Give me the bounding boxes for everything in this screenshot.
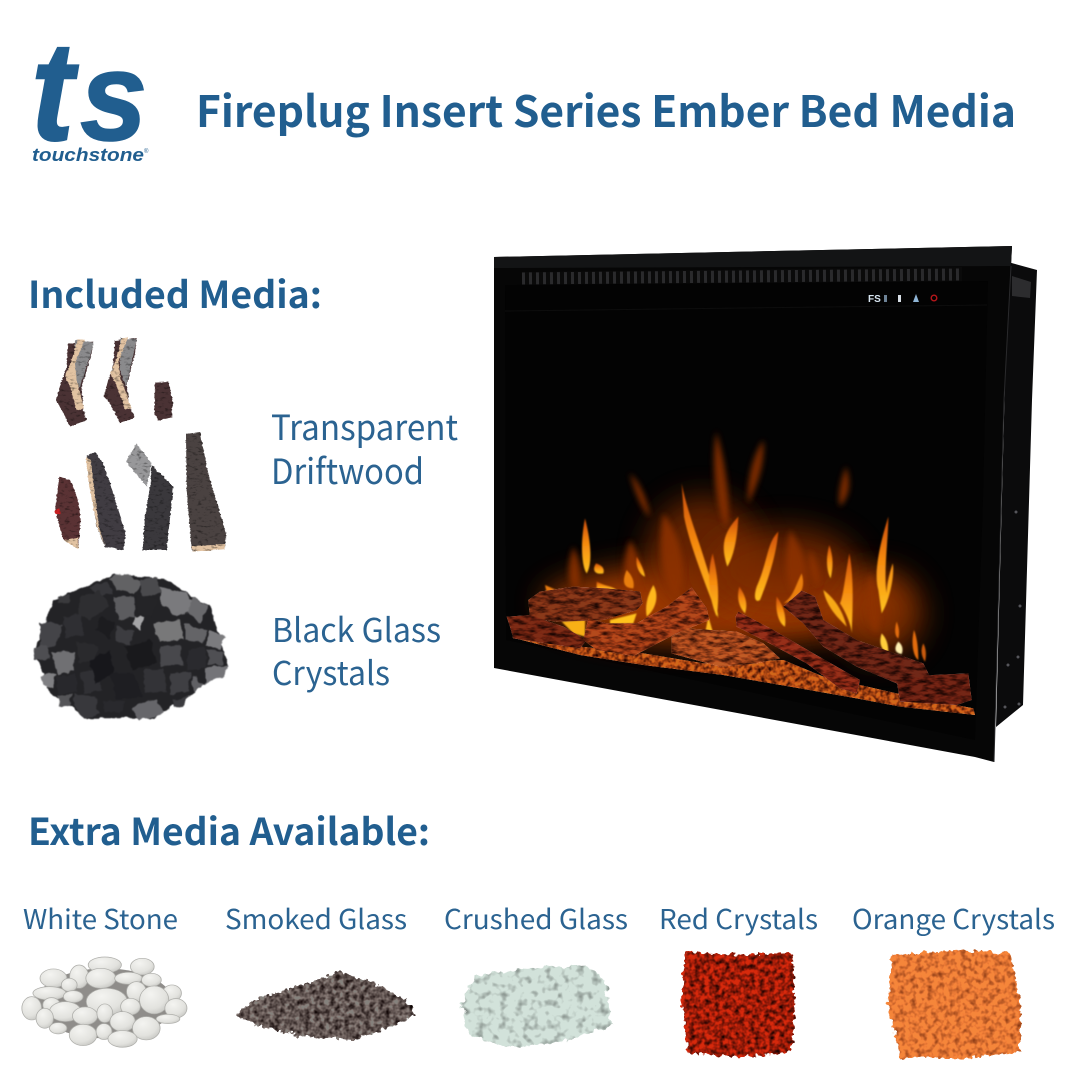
- logo: touchstone: s: [80, 27, 147, 168]
- image: black glass crystals pile: [33, 573, 228, 721]
- item: orange crystals: [852, 898, 1055, 1058]
- item: crushed glass: Crushed Glass: [444, 898, 628, 937]
- bright flames: [545, 483, 926, 662]
- item: crushed glass: [444, 898, 628, 1048]
- front frame: [494, 246, 1012, 762]
- logs: [507, 587, 972, 705]
- label: black glass crystals: Crystals: [272, 647, 390, 695]
- heading: extra media available: Extra Media Available:: [28, 802, 430, 856]
- label: transparent driftwood: Transparent: [271, 400, 458, 451]
- label: black glass crystals: [272, 604, 441, 695]
- label: black glass crystals: Black Glass: [272, 604, 441, 652]
- image: transparent driftwood log pieces: [55, 337, 226, 552]
- item: red crystals: Red Crystals: [659, 898, 818, 937]
- side panel: [996, 262, 1037, 727]
- item: red crystals: [659, 898, 818, 1057]
- logo: touchstone: t: [31, 12, 79, 170]
- side screws: [1004, 510, 1022, 708]
- item: orange crystals: Orange Crystals: [852, 898, 1055, 937]
- vent strip: [522, 267, 962, 285]
- item: smoked glass: [225, 898, 416, 1040]
- fireplace insert: [494, 246, 1037, 762]
- logo: touchstone: ®: [144, 148, 149, 155]
- flame glow: [543, 563, 903, 643]
- item: white stone: White Stone: [23, 898, 178, 937]
- dim flames: [569, 430, 880, 633]
- control icons: [868, 294, 937, 305]
- item: white stone: [22, 898, 187, 1047]
- logo: touchstone: touchstone: [32, 145, 144, 165]
- control icons: FS: [868, 294, 881, 305]
- label: transparent driftwood: Driftwood: [271, 444, 424, 495]
- label: transparent driftwood: [271, 400, 458, 495]
- top trim: [494, 246, 1012, 268]
- item: smoked glass: Smoked Glass: [225, 898, 407, 937]
- heading: included media: Included Media:: [28, 265, 322, 319]
- ember bed: [512, 637, 975, 715]
- flames and logs: [507, 430, 975, 715]
- logo: touchstone: [31, 12, 149, 170]
- mounting bracket: [1012, 276, 1031, 298]
- title: Fireplug Insert Series Ember Bed Media: [196, 78, 1016, 140]
- glass screen: [505, 281, 988, 740]
